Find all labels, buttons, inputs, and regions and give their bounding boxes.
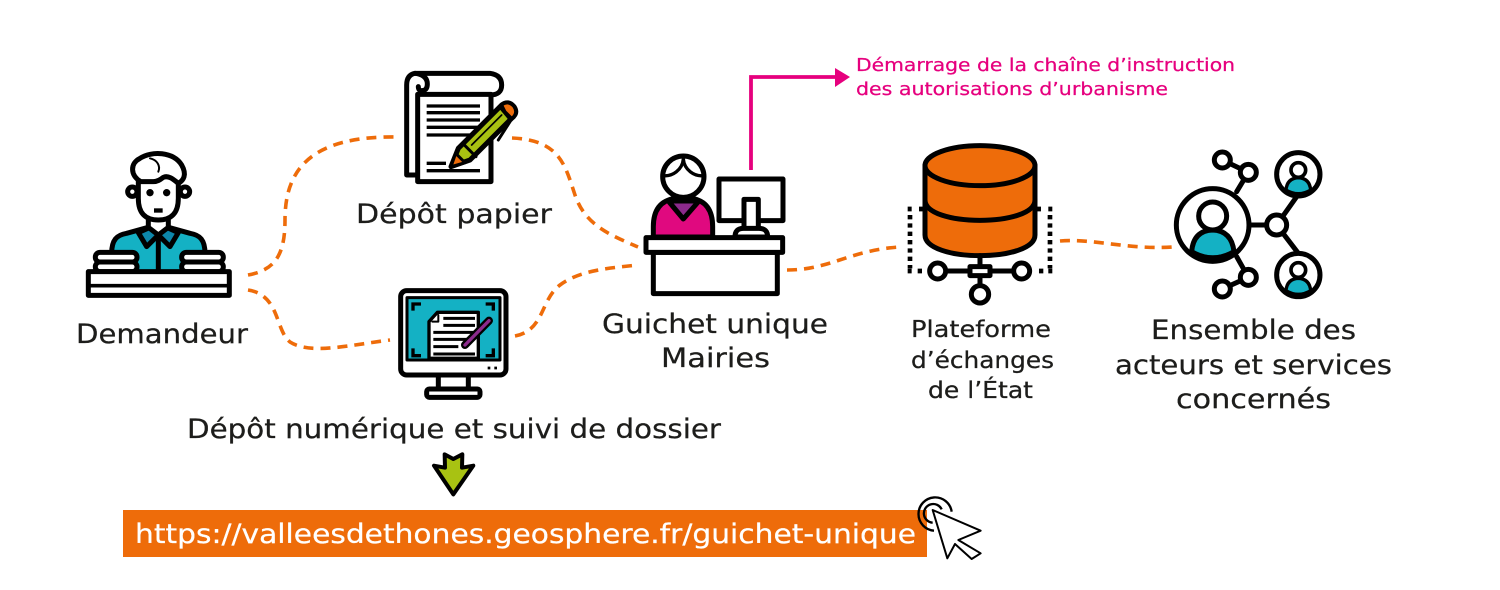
label: Dépôt numérique et suivi de dossier: Dépôt numérique et suivi de dossier — [187, 414, 722, 445]
label: Plateforme d'échanges de l'État: Plateforme — [911, 317, 1051, 343]
label: Plateforme d'échanges de l'État: d’échanges — [911, 348, 1054, 374]
URL banner: https://valleesdethones.geosphere.fr/guichet-unique — [135, 519, 916, 550]
dashed connector: plateforme to acteurs — [1060, 241, 1172, 247]
label: Ensemble des acteurs et services concernés: acteurs et services — [1115, 350, 1392, 381]
label: Guichet unique Mairies: Mairies — [661, 343, 770, 374]
label: Ensemble des acteurs et services concernés: Ensemble des — [1151, 315, 1356, 346]
label: Plateforme d'échanges de l'État: de l’État — [928, 376, 1033, 404]
URL banner — [123, 510, 927, 557]
label: Ensemble des acteurs et services concernés: concernés — [1176, 384, 1331, 415]
label: Guichet unique Mairies: Guichet unique — [602, 309, 828, 340]
icon: demandeur at desk — [88, 154, 229, 295]
label: Plateforme d'échanges de l'État — [911, 317, 1054, 404]
icon: database platform — [908, 146, 1052, 303]
arrow: green down arrow — [434, 454, 473, 494]
dashed connector: guichet to plateforme — [787, 247, 900, 270]
label: Demandeur: Demandeur — [76, 319, 249, 350]
icon: dépôt papier — [407, 73, 516, 182]
arrow: magenta arrow to instruction chain — [751, 68, 850, 170]
label: Dépôt papier: Dépôt papier — [356, 199, 553, 230]
label: Guichet unique Mairies — [602, 309, 828, 374]
dashed connector: dépôt papier to guichet — [512, 138, 638, 247]
label: Ensemble des acteurs et services concernés — [1115, 315, 1392, 415]
icon: cursor click — [919, 497, 981, 559]
dashed connector: demandeur to dépôt numérique — [248, 290, 390, 348]
callout: démarrage de la chaîne d'instruction: des autorisations d’urbanisme — [856, 79, 1168, 100]
callout: démarrage de la chaîne d'instruction: Démarrage de la chaîne d’instruction — [856, 55, 1235, 76]
icon: dépôt numérique monitor — [401, 291, 506, 397]
callout: démarrage de la chaîne d'instruction — [856, 55, 1235, 100]
dashed connector: dépôt numérique to guichet — [515, 265, 638, 336]
icon: network of actors — [1176, 152, 1320, 297]
icon: guichet agent and computer — [646, 156, 783, 294]
dashed connector: demandeur to dépôt papier — [248, 137, 400, 275]
